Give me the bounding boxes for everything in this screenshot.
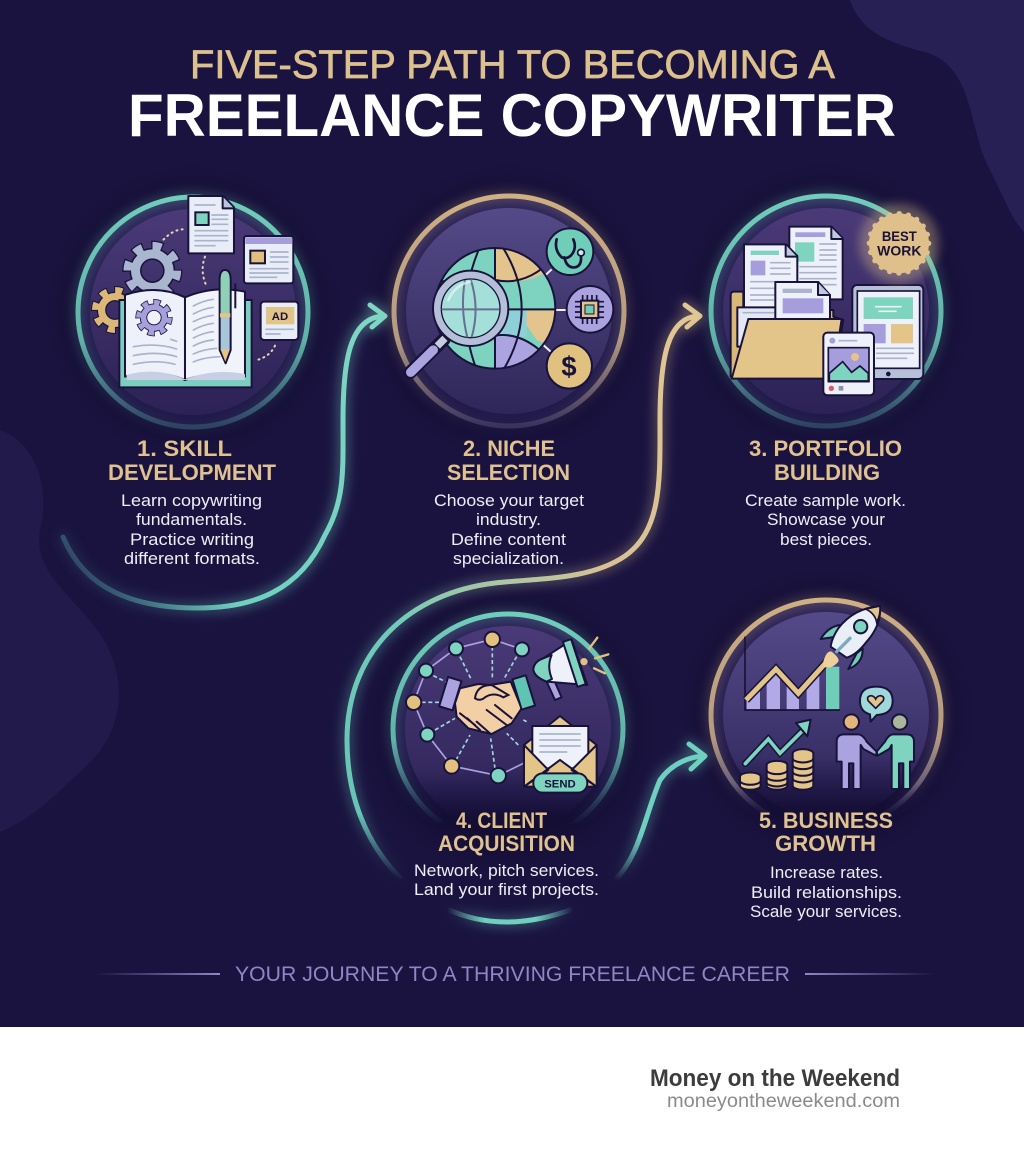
circle badge 3 xyxy=(711,196,941,426)
step 3 heading: BUILDING xyxy=(774,460,880,485)
footer website: moneyontheweekend.com xyxy=(667,1091,900,1112)
icon: book, pen, gears and documents: AD xyxy=(272,311,288,323)
footer xyxy=(0,1027,1024,1154)
step 1 heading xyxy=(108,436,277,485)
step 1 heading: DEVELOPMENT xyxy=(108,460,277,485)
icon: growth chart, rocket, coins and partners xyxy=(740,606,914,790)
step 5 heading: 5. BUSINESS xyxy=(759,808,893,833)
panel: step 4 client acquisition xyxy=(393,614,623,899)
step 3 description xyxy=(745,492,906,549)
circle badge 2 xyxy=(394,196,624,426)
step 4 description: Land your first projects. xyxy=(414,881,599,899)
step 3 heading xyxy=(749,436,902,485)
background blob left xyxy=(0,430,119,832)
arrow: step 2 to step 3 and around step 4 xyxy=(347,305,700,878)
step 2 heading: 2. NICHE xyxy=(463,436,555,461)
step 5 description: Increase rates. xyxy=(770,864,883,882)
circle badge 5 xyxy=(711,600,941,830)
step 2 description: specialization. xyxy=(453,550,564,568)
arrow: step 1 to step 2 xyxy=(63,305,385,608)
step 3 description: Showcase your xyxy=(767,511,886,529)
step 1 heading: 1. SKILL xyxy=(137,436,232,461)
step 2 heading: SELECTION xyxy=(447,460,570,485)
step 1 description: fundamentals. xyxy=(136,511,247,529)
step 3 heading: 3. PORTFOLIO xyxy=(749,436,902,461)
step 4 description: Network, pitch services. xyxy=(414,862,599,880)
footer brand name: Money on the Weekend xyxy=(650,1065,900,1092)
panel: step 3 portfolio building xyxy=(711,196,941,549)
step 1 description xyxy=(121,492,262,568)
panel: step 2 niche selection xyxy=(394,196,624,568)
step 4 heading: ACQUISITION xyxy=(438,831,575,856)
arc below step 4 xyxy=(447,909,573,922)
step 5 description: Build relationships. xyxy=(751,884,902,902)
step 5 heading: GROWTH xyxy=(775,831,876,856)
step 1 description: different formats. xyxy=(124,550,260,568)
icon: portfolio folder, documents, devices and best work seal: BEST xyxy=(882,229,917,244)
icon: network, handshake, megaphone and envelope xyxy=(406,632,608,793)
icon: globe with magnifier and industries: $ xyxy=(561,351,577,382)
icon: network, handshake, megaphone and envelope: SEND xyxy=(544,778,576,790)
icon: portfolio folder, documents, devices and best work seal: WORK xyxy=(877,243,922,258)
step 2 description xyxy=(434,492,584,568)
icon: globe with magnifier and industries xyxy=(410,228,613,389)
step 5 description: Scale your services. xyxy=(750,903,902,921)
circle badge 4 xyxy=(393,614,623,844)
step 2 heading xyxy=(447,436,570,485)
step 3 description: Create sample work. xyxy=(745,492,906,510)
step 2 description: Define content xyxy=(451,531,566,549)
panel: step 5 business growth xyxy=(711,600,941,921)
background blob top right xyxy=(850,0,1024,232)
panel: step 1 skill development xyxy=(78,196,308,568)
title line 2: FREELANCE COPYWRITER xyxy=(128,82,896,149)
icon: book, pen, gears and documents xyxy=(95,196,298,387)
step 2 description: Choose your target xyxy=(434,492,584,510)
arrow: step 4 to step 5 xyxy=(615,744,705,880)
circle badge 1 xyxy=(78,197,308,427)
step 1 description: Practice writing xyxy=(130,531,254,549)
tagline: YOUR JOURNEY TO A THRIVING FREELANCE CAREER xyxy=(235,963,790,986)
icon: portfolio folder, documents, devices and best work seal xyxy=(731,203,939,395)
step 2 description: industry. xyxy=(476,511,541,529)
step 5 description xyxy=(750,864,902,921)
step 5 heading xyxy=(759,808,893,856)
step 4 heading xyxy=(438,808,575,856)
step 3 description: best pieces. xyxy=(780,531,872,549)
step 4 description xyxy=(414,862,599,899)
step 4 heading: 4. CLIENT xyxy=(456,808,547,833)
halo behind circles xyxy=(43,161,976,879)
title xyxy=(128,43,896,149)
title line 1: FIVE-STEP PATH TO BECOMING A xyxy=(190,43,835,87)
step 1 description: Learn copywriting xyxy=(121,492,262,510)
